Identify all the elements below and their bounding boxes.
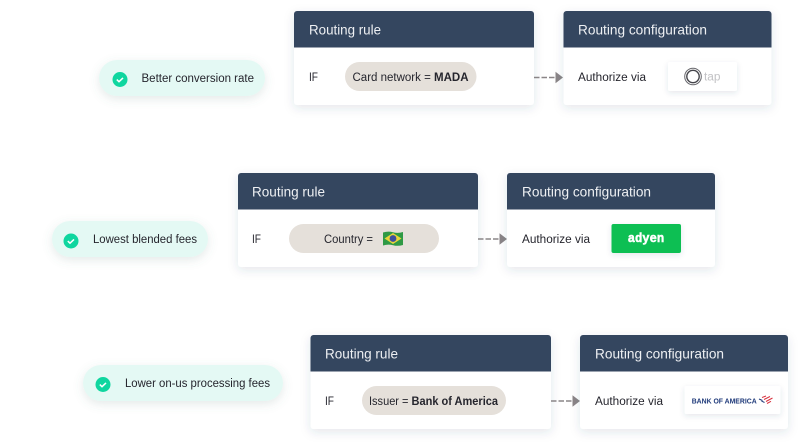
panel: routing configuration (564, 11, 772, 105)
row 3: lower on-us processing fees (83, 335, 788, 429)
panel: routing configuration: Routing configuration (578, 22, 707, 38)
badge: lower on-us processing fees: Lower on-us processing fees (125, 378, 270, 390)
panel: routing rule: Card network = MADA (352, 72, 468, 84)
panel: routing rule: Country = (324, 234, 373, 246)
panel: routing rule: IF (309, 72, 318, 84)
panel: routing rule: IF (325, 396, 334, 408)
badge: lower on-us processing fees (83, 365, 283, 401)
panel: routing configuration: Routing configuration (522, 184, 651, 200)
badge: lowest blended fees (52, 221, 208, 257)
panel: routing configuration (507, 173, 715, 267)
panel: routing configuration: Routing configuration (595, 346, 724, 362)
badge: better conversion rate (99, 60, 265, 96)
panel: routing configuration: Authorize via (595, 396, 664, 408)
panel: routing rule: Issuer = Bank of America (369, 396, 499, 408)
panel: routing rule: IF (252, 234, 261, 246)
panel: routing rule (310, 335, 551, 429)
row 1: better conversion rate (99, 11, 772, 105)
icon: Brazil flag (383, 232, 403, 246)
badge: better conversion rate: Better conversion rate (142, 73, 254, 85)
logo: Bank of America (684, 386, 780, 414)
logo: adyen (612, 224, 681, 253)
panel: routing rule (238, 173, 478, 267)
logo: tap (668, 62, 737, 91)
logo: tap: tap (704, 72, 720, 84)
panel: routing configuration: Authorize via (522, 234, 591, 246)
panel: routing rule: Routing rule (325, 346, 398, 362)
panel: routing rule (294, 11, 534, 105)
panel: routing configuration: Authorize via (578, 72, 647, 84)
arrow (534, 72, 563, 83)
badge: lowest blended fees: Lowest blended fees (93, 234, 197, 246)
arrow (551, 395, 580, 407)
logo: Bank of America: BANK OF AMERICA (692, 396, 757, 405)
panel: routing configuration (580, 335, 788, 429)
panel: routing rule: Routing rule (252, 184, 325, 200)
row 2: lowest blended fees (52, 173, 715, 267)
panel: routing rule: Routing rule (309, 22, 381, 38)
logo: adyen: adyen (628, 231, 664, 246)
arrow (478, 233, 507, 245)
